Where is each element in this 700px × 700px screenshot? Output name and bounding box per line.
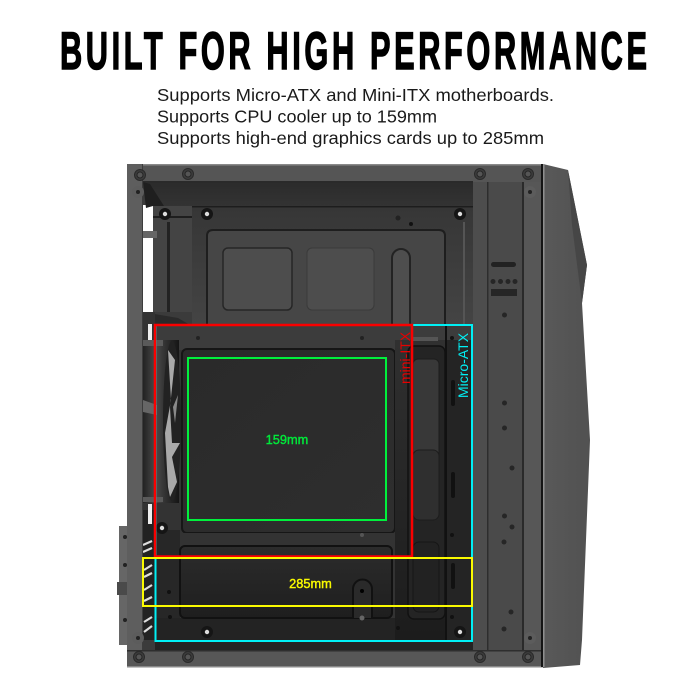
rear bracket: [117, 526, 128, 645]
PC case illustration: [117, 164, 590, 668]
right rail: [473, 164, 543, 667]
title: BUILT FOR HIGH PERFORMANCE: [60, 23, 647, 81]
mini-ITX outline: [155, 325, 413, 556]
Micro-ATX outline: Micro-ATX: [455, 332, 471, 398]
fan blade: [165, 350, 180, 497]
front panel: [543, 164, 590, 668]
expansion slots: [143, 504, 155, 640]
feature list: Supports high-end graphics cards up to 285mm: [157, 128, 544, 148]
CPU cooler outline: [188, 358, 386, 520]
Micro-ATX outline: [156, 325, 472, 641]
case screws: [132, 168, 536, 662]
graphics card outline: [143, 558, 472, 606]
case interior back wall: [143, 182, 473, 650]
upper embossed panel: [207, 216, 465, 327]
mini-ITX outline: mini-ITX: [397, 331, 413, 384]
rear fan: [143, 312, 181, 522]
graphics card outline: 285mm: [289, 576, 332, 591]
feature list: Supports Micro-ATX and Mini-ITX motherboards.: [157, 85, 554, 105]
fan blade small: [173, 395, 178, 423]
CPU cooler outline: 159mm: [266, 432, 308, 447]
case frame: [127, 164, 543, 668]
feature list: Supports CPU cooler up to 159mm: [157, 106, 437, 126]
motherboard tray: [155, 325, 473, 650]
feature list: [157, 85, 554, 148]
